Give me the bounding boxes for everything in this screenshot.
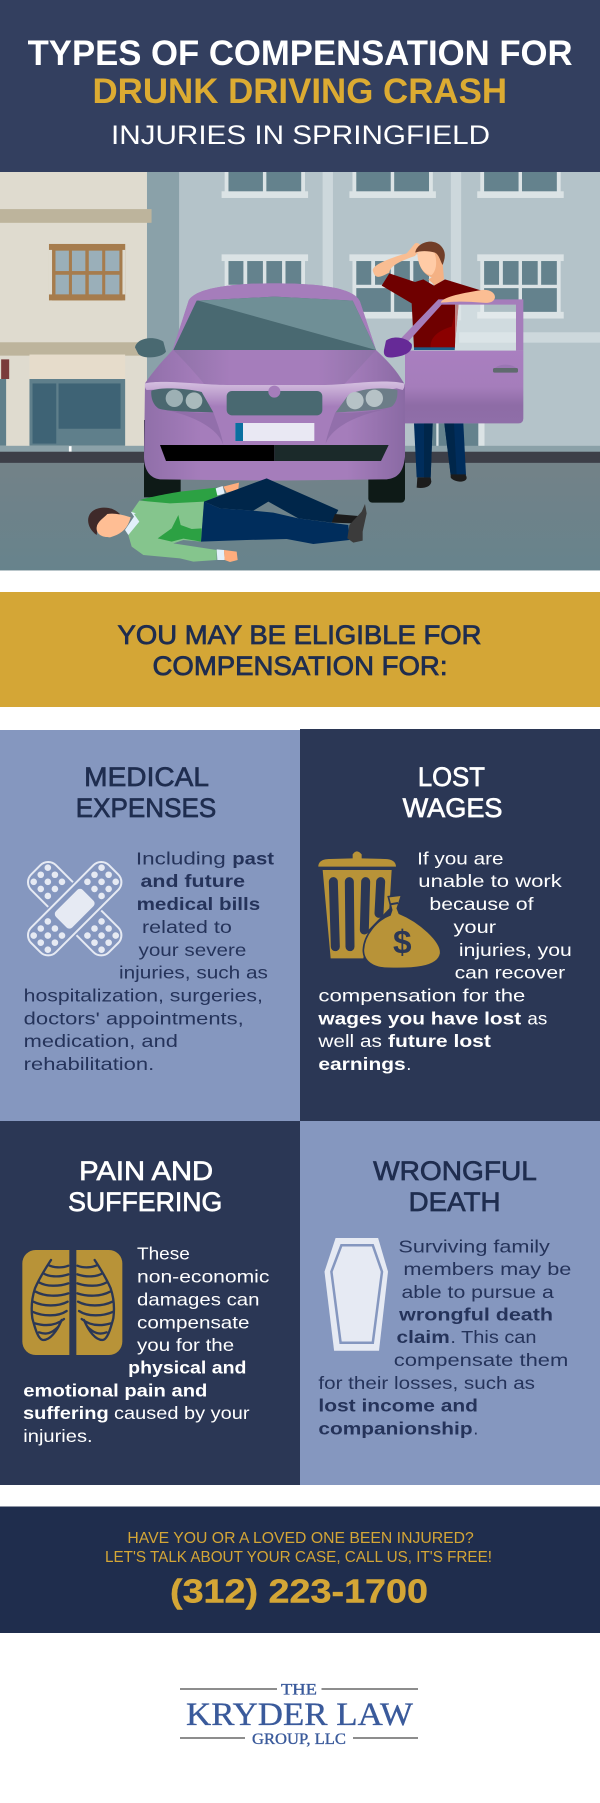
street background bbox=[0, 172, 600, 570]
body text: wrongful death: claim bbox=[396, 1327, 450, 1347]
phone number: (312) 223-1700 bbox=[170, 1572, 428, 1610]
body text: pain and suffering: physical and bbox=[128, 1358, 246, 1378]
body text: medical expenses: and future bbox=[140, 871, 245, 891]
illustration: crash scene bbox=[0, 172, 600, 570]
panel: lost wages bbox=[300, 729, 600, 1121]
body text: lost wages: as bbox=[527, 1008, 548, 1028]
heading: medical expenses: EXPENSES bbox=[76, 793, 216, 823]
body text: wrongful death: . bbox=[473, 1419, 478, 1439]
body text: medical expenses: your severe bbox=[138, 940, 246, 960]
heading: wrongful death: DEATH bbox=[409, 1187, 501, 1217]
panel: medical expenses bbox=[0, 730, 300, 1121]
body text: medical expenses: medication, and bbox=[24, 1031, 178, 1051]
heading: wrongful death: WRONGFUL bbox=[373, 1156, 537, 1186]
car door bbox=[384, 290, 523, 423]
body text: wrongful death bbox=[318, 1236, 571, 1439]
call to action footer bbox=[0, 1506, 600, 1633]
building windows bbox=[222, 172, 564, 448]
body text: lost wages: injuries, you bbox=[459, 940, 572, 960]
heading: pain and suffering bbox=[68, 1156, 222, 1217]
body text: lost wages: can recover bbox=[455, 963, 565, 983]
body text: pain and suffering: non-economic bbox=[137, 1266, 270, 1286]
logo: The Kryder Law Group: THE bbox=[281, 1682, 317, 1699]
purple car bbox=[135, 283, 405, 503]
body text: lost wages: unable to work bbox=[418, 871, 562, 891]
body text: medical expenses: medical bills bbox=[137, 894, 261, 914]
body text: lost wages: well as bbox=[317, 1031, 382, 1051]
pavement and road bbox=[0, 446, 600, 570]
heading: medical expenses: MEDICAL bbox=[84, 762, 209, 792]
panel: pain and suffering bbox=[0, 1121, 300, 1485]
icon: crossed bandages bbox=[22, 856, 128, 962]
body text: wrongful death: able to pursue a bbox=[402, 1282, 554, 1302]
body text: lost wages: future lost bbox=[388, 1031, 491, 1051]
icon: trash can and money bag bbox=[318, 851, 441, 968]
body text: pain and suffering: caused by your bbox=[114, 1403, 250, 1423]
heading: medical expenses bbox=[76, 762, 216, 823]
title line 3: INJURIES IN SPRINGFIELD bbox=[111, 120, 490, 150]
call to action text: HAVE YOU OR A LOVED ONE BEEN INJURED? bbox=[127, 1530, 474, 1547]
body text: lost wages: earnings bbox=[318, 1054, 406, 1074]
body text: pain and suffering bbox=[23, 1244, 270, 1446]
body text: medical expenses: past bbox=[232, 848, 274, 868]
heading: pain and suffering: PAIN AND bbox=[79, 1156, 213, 1186]
body text: pain and suffering: injuries. bbox=[23, 1426, 93, 1446]
logo: The Kryder Law Group: KRYDER LAW bbox=[186, 1697, 414, 1733]
icon: coffin bbox=[324, 1238, 388, 1351]
body text: lost wages: your bbox=[454, 917, 496, 937]
body text: medical expenses: Including bbox=[136, 848, 226, 868]
body text: medical expenses: doctors' appointments, bbox=[24, 1008, 244, 1028]
logo: The Kryder Law Group: GROUP, LLC bbox=[252, 1731, 346, 1748]
body text: wrongful death: . This can bbox=[450, 1327, 536, 1347]
body text: medical expenses: related to bbox=[142, 917, 232, 937]
body text: pain and suffering: compensate bbox=[137, 1312, 250, 1332]
heading: lost wages bbox=[403, 762, 502, 823]
body text: pain and suffering: damages can bbox=[137, 1290, 260, 1310]
panel: wrongful death bbox=[300, 1121, 600, 1485]
body text: medical expenses: hospitalization, surgeries, bbox=[24, 986, 263, 1006]
body text: pain and suffering: emotional pain and bbox=[23, 1380, 207, 1400]
logo: The Kryder Law Group bbox=[180, 1682, 418, 1748]
standing man bbox=[373, 242, 482, 488]
body text: pain and suffering: suffering bbox=[23, 1403, 109, 1423]
heading: pain and suffering: SUFFERING bbox=[68, 1187, 222, 1217]
body text: wrongful death: for their losses, such as bbox=[318, 1373, 535, 1393]
body text: lost wages: because of bbox=[429, 894, 534, 914]
title line 1: TYPES OF COMPENSATION FOR bbox=[28, 34, 573, 73]
eligibility banner bbox=[0, 592, 600, 707]
body text: pain and suffering: These bbox=[137, 1244, 190, 1264]
icon: rib cage bbox=[22, 1250, 122, 1355]
header panel bbox=[0, 0, 600, 172]
body text: pain and suffering: you for the bbox=[137, 1335, 234, 1355]
beige shop building bbox=[0, 172, 152, 447]
body text: wrongful death: compensate them bbox=[394, 1350, 568, 1370]
body text: lost wages: If you are bbox=[417, 848, 504, 868]
body text: wrongful death: members may be bbox=[403, 1259, 571, 1279]
heading: lost wages: WAGES bbox=[403, 793, 502, 823]
call to action text bbox=[105, 1530, 492, 1566]
body text: wrongful death: companionship bbox=[318, 1419, 473, 1439]
body text: wrongful death: wrongful death bbox=[398, 1305, 553, 1325]
body text: lost wages: wages you have lost bbox=[317, 1008, 521, 1028]
body text: lost wages: . bbox=[406, 1054, 411, 1074]
body text: medical expenses: injuries, such as bbox=[119, 963, 268, 983]
body text: lost wages bbox=[317, 848, 572, 1074]
banner text line 2: COMPENSATION FOR: bbox=[152, 651, 448, 681]
body text: lost wages: compensation for the bbox=[318, 986, 525, 1006]
banner text line 1: YOU MAY BE ELIGIBLE FOR bbox=[118, 620, 482, 650]
body text: medical expenses: rehabilitation. bbox=[24, 1054, 154, 1074]
title line 2: DRUNK DRIVING CRASH bbox=[92, 72, 507, 111]
body text: wrongful death: Surviving family bbox=[398, 1236, 550, 1256]
heading: lost wages: LOST bbox=[418, 762, 485, 792]
injured man on road bbox=[88, 478, 367, 562]
body text: medical expenses bbox=[24, 848, 274, 1074]
heading: wrongful death bbox=[373, 1156, 537, 1217]
call to action text: LET'S TALK ABOUT YOUR CASE, CALL US, IT'S FREE! bbox=[105, 1549, 492, 1566]
icon: trash can and money bag: $ bbox=[393, 924, 412, 961]
body text: wrongful death: lost income and bbox=[318, 1396, 478, 1416]
